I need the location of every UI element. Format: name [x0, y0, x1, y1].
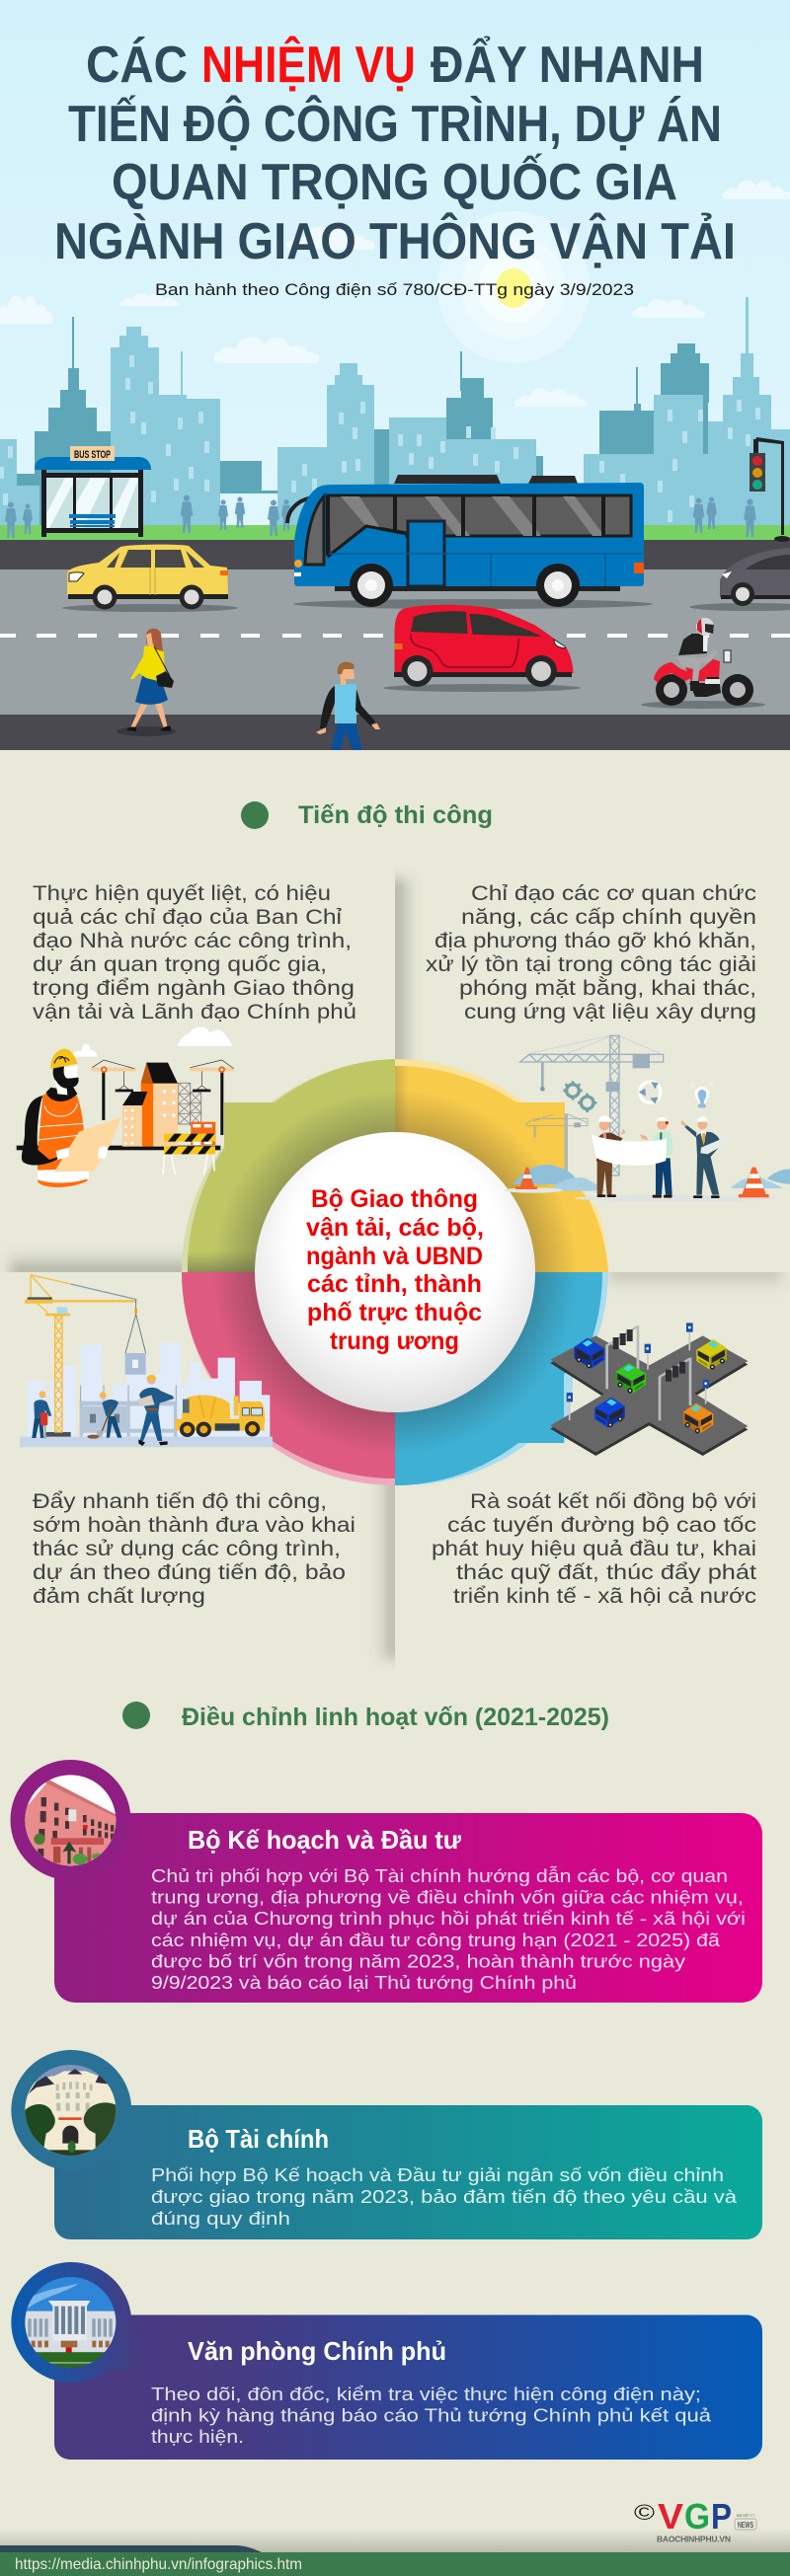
centre text: vận tải, các bộ, [306, 1214, 484, 1242]
lane dashes [0, 634, 790, 638]
text block: top left: dự án quan trọng quốc gia, [33, 953, 327, 976]
body text: định kỳ hàng tháng báo cáo Thủ tướng Chính phủ kết quả [151, 2404, 712, 2426]
quadrant: blue [395, 1272, 608, 1485]
centre text: trung ương [330, 1327, 459, 1355]
logo: VGP News: © [634, 2500, 655, 2525]
title: QUAN TRỌNG QUỐC GIA [112, 153, 677, 211]
body text: Theo dõi, đôn đốc, kiểm tra việc thực hiện công điện này; [151, 2384, 701, 2404]
logo: VGP News [634, 2496, 756, 2544]
text block: top right [426, 882, 756, 1023]
centre text: Bộ Giao thông [311, 1185, 478, 1213]
title: Văn phòng Chính phủ [188, 2336, 446, 2366]
footer [0, 2529, 790, 2576]
title: CÁC [86, 37, 188, 94]
body text: dự án của Chương trình phục hồi phát triển kinh tế - xã hội với [151, 1908, 746, 1929]
red car [383, 605, 581, 692]
logo: VGP News: G [684, 2496, 710, 2537]
title: NGÀNH GIAO THÔNG VẬN TẢI [54, 212, 736, 270]
text block: bottom right [432, 1490, 756, 1608]
title: Bộ Kế hoạch và Đầu tư [188, 1825, 461, 1855]
centre text: phố trực thuộc [307, 1299, 482, 1326]
photo: finance ministry [23, 2063, 118, 2159]
title: ĐẨY NHANH [431, 36, 704, 94]
text block: top left: đạo Nhà nước các công trình, [33, 930, 352, 952]
logo: VGP News: BAOCHINHPHU.VN [657, 2535, 731, 2544]
text block: bottom right: Rà soát kết nối đồng bộ với [470, 1490, 756, 1513]
pedestrian silhouettes [5, 495, 756, 538]
body text [151, 1865, 746, 1993]
text block: bottom left: đảm chất lượng [33, 1585, 205, 1608]
walking woman [117, 629, 176, 736]
photo: ministry building [25, 1775, 117, 1865]
illustration: worker with plans [17, 1026, 234, 1187]
centre text [306, 1185, 484, 1355]
body text: các nhiệm vụ, dự án đầu tư công trung hạn (2021 - 2025) đã [151, 1930, 721, 1950]
centre text: các tỉnh, thành [307, 1270, 482, 1298]
skyline buildings [0, 297, 790, 525]
photo: government office [23, 2273, 118, 2369]
body text: Phối hợp Bộ Kế hoạch và Đầu tư giải ngân số vốn điều chỉnh [151, 2164, 724, 2185]
bus stop [35, 446, 151, 537]
footer: https://media.chinhphu.vn/infographics.htm [15, 2556, 302, 2573]
text block: top right: phóng mặt bằng, khai thác, [459, 977, 756, 1000]
body text: đúng quy định [151, 2208, 290, 2229]
text block: bottom left: thác sử dụng các công trình, [33, 1538, 341, 1560]
heading: Tiến độ thi công: Tiến độ thi công [298, 801, 493, 829]
yellow car [62, 545, 238, 612]
header city illustration [0, 0, 790, 750]
card: Bộ Tài chính [11, 2050, 762, 2239]
quadrant: olive [182, 1059, 395, 1272]
grass strip [0, 525, 790, 540]
text block: top right: xử lý tồn tại trong công tác giải [426, 953, 756, 976]
text block: top left: trọng điểm ngành Giao thông [33, 977, 355, 1000]
motorbike rider [641, 618, 765, 709]
sky [0, 0, 790, 540]
quadrant: yellow [395, 1059, 608, 1272]
centre disc [255, 1132, 535, 1412]
title: NHIỆM VỤ [201, 36, 416, 94]
fold shadows of the cross [10, 878, 782, 1659]
quadrant: pink [182, 1272, 395, 1485]
shadow around disc [212, 1090, 578, 1455]
text block: top right: cung ứng vật liệu xây dựng [464, 1001, 756, 1023]
text block: bottom left [33, 1490, 356, 1608]
logo: VGP News: NEWS [738, 2521, 753, 2530]
text block: top right: Chỉ đạo các cơ quan chức [471, 882, 756, 905]
body text: được giao trong năm 2023, bảo đảm tiến độ theo yêu cầu và [151, 2186, 738, 2207]
text block: top left: quả các chỉ đạo của Ban Chỉ [33, 906, 342, 929]
road [0, 569, 790, 715]
clouds [0, 181, 790, 407]
body text: 9/9/2023 và báo cáo lại Thủ tướng Chính phủ [151, 1972, 577, 1993]
subtitle: Ban hành theo Công điện số 780/CĐ-TTg ngày 3/9/2023 [155, 280, 634, 299]
logo: VGP News: V [658, 2496, 683, 2537]
bus stop: BUS STOP [74, 449, 111, 461]
text block: top left: Thực hiện quyết liệt, có hiệu [33, 882, 331, 905]
upper pavement [0, 540, 790, 569]
text block: bottom left: Đẩy nhanh tiến độ thi công, [33, 1490, 327, 1513]
text block: top right: năng, các cấp chính quyền [461, 906, 756, 929]
body text: thực hiện. [151, 2426, 244, 2447]
traffic light [750, 437, 790, 542]
card: Bộ Kế hoạch và Đầu tư [10, 1760, 762, 2003]
title: Bộ Tài chính [188, 2124, 329, 2154]
text block: top right: địa phương tháo gỡ khó khăn, [434, 930, 756, 952]
text block: bottom right: thác quỹ đất, thúc đẩy phát [456, 1561, 756, 1584]
card: Văn phòng Chính phủ [11, 2262, 762, 2460]
heading: Điều chỉnh linh hoạt vốn: Điều chỉnh linh hoạt vốn (2021-2025) [182, 1704, 609, 1731]
text block: bottom left: sớm hoàn thành đưa vào khai [33, 1514, 356, 1537]
text block: bottom left: dự án theo đúng tiến độ, bảo [33, 1561, 346, 1584]
text block: bottom right: các tuyến đường bộ cao tốc [447, 1514, 756, 1537]
body text: trung ương, địa phương về điều chỉnh vốn giữa các nhiệm vụ, [151, 1887, 744, 1907]
title [54, 36, 736, 270]
illustration: engineers reading blueprint [504, 1035, 790, 1201]
illustration: road intersection with cars [550, 1323, 748, 1456]
logo: VGP News: ĐÀI VIỆT Y T [737, 2513, 754, 2518]
grey car [689, 548, 790, 611]
sun [437, 211, 590, 363]
body text: Chủ trì phối hợp với Bộ Tài chính hướng dẫn các bộ, cơ quan [151, 1865, 728, 1886]
centre text: ngành và UBND [306, 1243, 483, 1270]
text block: bottom right: phát huy hiệu quả đầu tư, khai [432, 1538, 756, 1560]
four-part central diagram [182, 1059, 608, 1485]
illustration: construction workers and truck [20, 1275, 273, 1447]
blue bus [287, 475, 653, 609]
body text: được bố trí vốn trong năm 2023, hoàn thành trước ngày [151, 1950, 686, 1972]
lower pavement [0, 715, 790, 750]
body text [151, 2164, 738, 2229]
walking man [316, 662, 380, 750]
body text [151, 2384, 712, 2447]
text block: bottom right: triển kinh tế - xã hội cả nước [453, 1585, 756, 1608]
text block: top left [33, 882, 356, 1023]
logo: VGP News: P [711, 2496, 732, 2537]
text block: top left: vận tải và Lãnh đạo Chính phủ [33, 1001, 356, 1023]
